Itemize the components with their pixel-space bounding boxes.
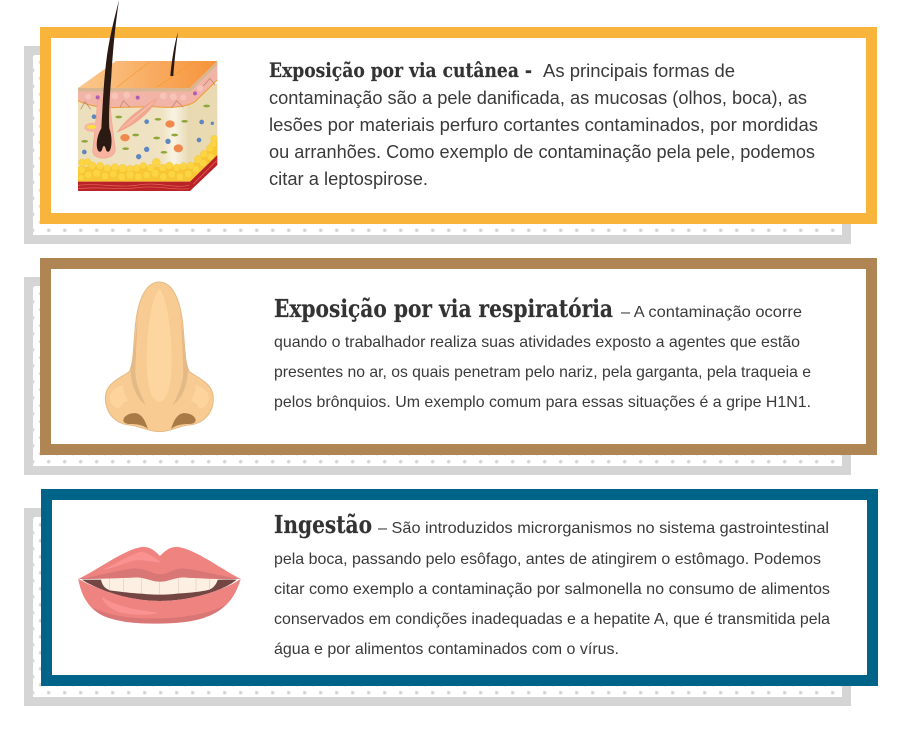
frame — [46, 32, 872, 218]
text block: cutânea: ou arranhões. Como exemplo de contaminação pela pele, podemos — [269, 142, 815, 162]
text block: cutânea: citar a leptospirose. — [269, 169, 428, 189]
text block: respiratória: – A contaminação ocorre — [621, 304, 802, 321]
text block: ingestão: pela boca, passando pelo esôfago, antes de atingirem o estômago. Podemos — [274, 551, 821, 568]
text block: ingestão — [274, 520, 830, 658]
heading: ingestão: Ingestão — [274, 510, 372, 539]
text block: ingestão: conservados em condições inadequadas e a hepatite A, que é transmitida pela — [274, 611, 830, 628]
text block: respiratória: presentes no ar, os quais penetram pelo nariz, pela garganta, pela traqueia e — [274, 364, 811, 381]
text block: ingestão: – São introduzidos microrganismos no sistema gastrointestinal — [378, 520, 829, 537]
panel: exposição cutânea — [24, 0, 872, 244]
heading: exposição por via cutânea: Exposição por via cutânea - — [269, 58, 532, 82]
panel: exposição respiratória — [24, 264, 872, 475]
icon: nose — [105, 282, 213, 432]
text block: ingestão: citar como exemplo a contaminação por salmonella no consumo de alimentos — [274, 581, 830, 598]
text block: cutânea — [269, 61, 818, 189]
icon: lips — [78, 547, 241, 624]
heading: exposição por via respiratória: Exposição por via respiratória — [274, 294, 613, 323]
frame — [46, 494, 872, 680]
text block: ingestão: água e por alimentos contaminados com o vírus. — [274, 641, 619, 658]
icon: skin cross-section — [78, 0, 217, 191]
text block: cutânea: contaminação são a pele danificada, as mucosas (olhos, boca), as — [269, 88, 807, 108]
text block: cutânea: As principais formas de — [543, 61, 735, 81]
text block: cutânea: lesões por materiais perfuro cortantes contaminados, por mordidas — [269, 115, 818, 135]
dotted backing card — [24, 277, 851, 475]
frame — [46, 264, 872, 450]
text block: respiratória — [274, 304, 811, 411]
dotted backing card — [24, 508, 851, 706]
dotted backing card — [24, 46, 851, 244]
panel: ingestão — [24, 494, 872, 706]
text block: respiratória: pelos brônquios. Um exemplo comum para essas situações é a gripe H1N1. — [274, 394, 811, 411]
text block: respiratória: quando o trabalhador realiza suas atividades exposto a agentes que estão — [274, 334, 800, 351]
